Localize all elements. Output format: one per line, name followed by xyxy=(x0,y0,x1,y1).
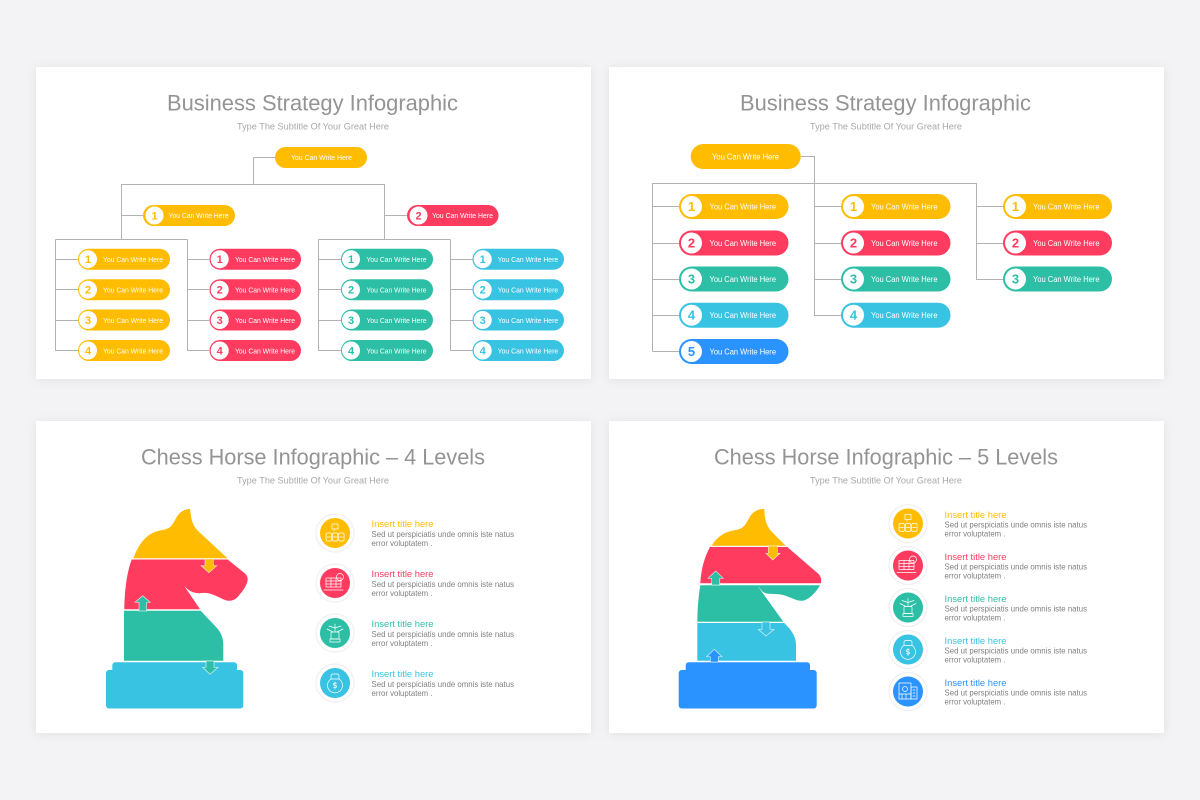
chess horse chart xyxy=(679,509,821,708)
arrow: light blue down xyxy=(758,622,774,636)
first column of pills: You Can Write Here xyxy=(710,275,777,284)
first column of pills xyxy=(679,194,788,364)
icon: building xyxy=(899,683,917,699)
icon: kettlebell xyxy=(328,674,342,693)
list item 3 xyxy=(316,614,514,652)
subtitle: Type The Subtitle Of Your Great Here xyxy=(237,476,389,486)
list item 3: Insert title here xyxy=(944,594,1006,605)
chess horse chart xyxy=(106,509,248,708)
list item 5 xyxy=(889,672,1087,710)
list item 1 xyxy=(889,504,1087,542)
level 4: chest xyxy=(697,623,796,661)
branch pill 2: 2 xyxy=(415,210,422,222)
third column of pills xyxy=(1003,194,1112,292)
yellow column of pills: You Can Write Here xyxy=(103,318,163,325)
heading: Business Strategy Infographic xyxy=(740,90,1031,116)
teal column of pills: 2 xyxy=(348,285,354,297)
yellow column of pills: 3 xyxy=(85,315,91,327)
light blue column of pills xyxy=(472,249,564,361)
root pill xyxy=(691,144,801,169)
list item 2: error voluptatem . xyxy=(944,571,1006,581)
list item 1: error voluptatem . xyxy=(944,529,1006,539)
yellow column of pills: You Can Write Here xyxy=(103,257,163,264)
list item 1: Insert title here xyxy=(944,510,1006,521)
yellow column of pills: You Can Write Here xyxy=(103,348,163,355)
second column of pills: You Can Write Here xyxy=(871,239,938,248)
list item 3: error voluptatem . xyxy=(372,638,432,648)
third column of pills: 3 xyxy=(1012,272,1019,286)
red column of pills: 2 xyxy=(217,285,223,297)
branch pill 1 xyxy=(143,205,235,226)
branch pill 2: You Can Write Here xyxy=(432,213,493,220)
subtitle: Type The Subtitle Of Your Great Here xyxy=(810,122,962,132)
icon: money stacks xyxy=(899,514,917,532)
third column of pills: You Can Write Here xyxy=(1033,202,1100,212)
heading: Chess Horse Infographic – 4 Levels xyxy=(141,444,485,470)
list item 2: Insert title here xyxy=(944,552,1006,563)
yellow column of pills xyxy=(78,249,170,361)
branch pill 2 xyxy=(407,205,498,226)
list item 1 xyxy=(316,514,514,552)
second column of pills: You Can Write Here xyxy=(871,311,938,320)
list item 3: Sed ut perspiciatis unde omnis iste natus xyxy=(944,604,1087,614)
level 1: ear xyxy=(712,509,786,546)
tree connectors xyxy=(56,158,473,350)
root pill xyxy=(275,147,367,168)
yellow column of pills: You Can Write Here xyxy=(103,288,163,294)
first column of pills: 1 xyxy=(688,199,695,214)
third column of pills: 2 xyxy=(1012,236,1019,250)
first column of pills: You Can Write Here xyxy=(710,348,777,356)
level 2: forehead xyxy=(700,547,821,583)
icon: laptop with badge xyxy=(324,574,344,590)
heading: Chess Horse Infographic – 5 Levels xyxy=(714,444,1058,470)
first column of pills: You Can Write Here xyxy=(710,239,777,248)
icon: plant pot xyxy=(327,624,343,642)
second column of pills: 1 xyxy=(850,199,857,214)
panel: business strategy, three-column tree xyxy=(609,67,1164,379)
list item 4: error voluptatem . xyxy=(372,688,432,698)
list item 3: Sed ut perspiciatis unde omnis iste natus xyxy=(372,629,514,639)
list item 3: Insert title here xyxy=(372,619,434,630)
arrow: blue up xyxy=(707,649,722,662)
list item 1: Insert title here xyxy=(372,519,434,530)
teal column of pills: You Can Write Here xyxy=(366,257,427,264)
second column of pills: 2 xyxy=(850,236,857,250)
list item 4 xyxy=(316,664,514,702)
subtitle: Type The Subtitle Of Your Great Here xyxy=(810,476,962,486)
teal column of pills: 4 xyxy=(348,346,355,358)
list item 1: error voluptatem . xyxy=(372,538,432,548)
list item 2: Sed ut perspiciatis unde omnis iste natus xyxy=(372,579,514,589)
level 2: muzzle xyxy=(124,560,248,609)
icon: money stacks xyxy=(326,524,344,541)
red column of pills xyxy=(210,249,301,361)
list item 3: error voluptatem . xyxy=(944,613,1006,623)
list item 4: Sed ut perspiciatis unde omnis iste natus xyxy=(372,679,514,689)
red column of pills: 3 xyxy=(217,315,223,327)
teal column of pills: 3 xyxy=(348,315,354,327)
arrow: teal up xyxy=(135,596,150,611)
panel: chess horse, 5 levels xyxy=(609,421,1164,733)
first column of pills: You Can Write Here xyxy=(710,311,777,320)
light blue column of pills: 2 xyxy=(480,285,486,297)
list item 2: Sed ut perspiciatis unde omnis iste natus xyxy=(944,562,1087,572)
list item 4: Sed ut perspiciatis unde omnis iste natus xyxy=(944,646,1087,656)
first column of pills: 5 xyxy=(688,344,695,359)
icon: kettlebell xyxy=(901,640,916,659)
third column of pills: You Can Write Here xyxy=(1033,275,1100,284)
red column of pills: You Can Write Here xyxy=(235,257,295,264)
second column of pills: 3 xyxy=(850,272,857,286)
red column of pills: You Can Write Here xyxy=(235,318,295,325)
list item 2: Insert title here xyxy=(372,569,434,580)
subtitle: Type The Subtitle Of Your Great Here xyxy=(237,122,389,132)
list item 1: Sed ut perspiciatis unde omnis iste natus xyxy=(944,520,1087,530)
light blue column of pills: You Can Write Here xyxy=(498,288,558,294)
list item 5: Sed ut perspiciatis unde omnis iste natus xyxy=(944,688,1087,698)
level 3: neck xyxy=(124,611,223,661)
teal column of pills: You Can Write Here xyxy=(366,348,427,355)
list item 4: error voluptatem . xyxy=(944,655,1006,665)
panel: chess horse, 4 levels xyxy=(36,421,591,733)
list item 4: Insert title here xyxy=(372,669,434,680)
first column of pills: 3 xyxy=(688,272,695,286)
first column of pills: 2 xyxy=(688,236,695,250)
root pill: You Can Write Here xyxy=(712,152,780,162)
list item 2: error voluptatem . xyxy=(372,588,432,598)
second column of pills: You Can Write Here xyxy=(871,275,938,284)
level 1: ear xyxy=(134,509,228,558)
level 5: base xyxy=(679,662,817,708)
teal column of pills: You Can Write Here xyxy=(366,318,427,325)
list item 4 xyxy=(889,630,1087,668)
teal column of pills: 1 xyxy=(348,254,354,266)
branch pill 1: You Can Write Here xyxy=(168,213,229,220)
light blue column of pills: You Can Write Here xyxy=(498,318,558,325)
icon: plant pot xyxy=(900,598,916,616)
third column of pills: 1 xyxy=(1012,199,1019,214)
level 3: muzzle and neck xyxy=(697,585,820,622)
red column of pills: You Can Write Here xyxy=(235,288,295,294)
panel: business strategy, two-level tree xyxy=(36,67,591,379)
heading: Business Strategy Infographic xyxy=(167,90,458,116)
light blue column of pills: 1 xyxy=(480,254,486,266)
first column of pills: 4 xyxy=(688,308,696,323)
arrow: teal up xyxy=(708,571,723,585)
red column of pills: You Can Write Here xyxy=(235,348,295,355)
first column of pills: You Can Write Here xyxy=(710,202,777,212)
light blue column of pills: 3 xyxy=(480,315,486,327)
light blue column of pills: You Can Write Here xyxy=(498,348,558,355)
list item 2 xyxy=(889,546,1087,584)
root pill: You Can Write Here xyxy=(291,155,352,162)
list item 5: Insert title here xyxy=(944,678,1006,689)
arrow: light blue down xyxy=(203,661,218,674)
second column of pills: 4 xyxy=(850,308,858,323)
list item 1: Sed ut perspiciatis unde omnis iste natus xyxy=(372,529,514,539)
list item 3 xyxy=(889,588,1087,626)
red column of pills: 4 xyxy=(217,346,224,358)
arrow: yellow down xyxy=(766,546,780,560)
list item 5: error voluptatem . xyxy=(944,697,1006,707)
tree connectors xyxy=(652,156,1003,352)
teal column of pills: You Can Write Here xyxy=(366,288,427,294)
third column of pills: You Can Write Here xyxy=(1033,239,1100,248)
yellow column of pills: 1 xyxy=(85,254,91,266)
yellow column of pills: 2 xyxy=(85,285,91,297)
list item 2 xyxy=(316,564,514,602)
red column of pills: 1 xyxy=(217,254,223,266)
second column of pills xyxy=(841,194,950,328)
icon: laptop with badge xyxy=(897,556,916,572)
light blue column of pills: You Can Write Here xyxy=(498,257,558,264)
teal column of pills xyxy=(341,249,433,361)
arrow: yellow down xyxy=(201,559,217,573)
level 4: base xyxy=(106,662,243,708)
list item 4: Insert title here xyxy=(944,636,1006,647)
branch pill 1: 1 xyxy=(151,210,158,222)
light blue column of pills: 4 xyxy=(480,346,487,358)
yellow column of pills: 4 xyxy=(85,346,92,358)
second column of pills: You Can Write Here xyxy=(871,202,938,212)
